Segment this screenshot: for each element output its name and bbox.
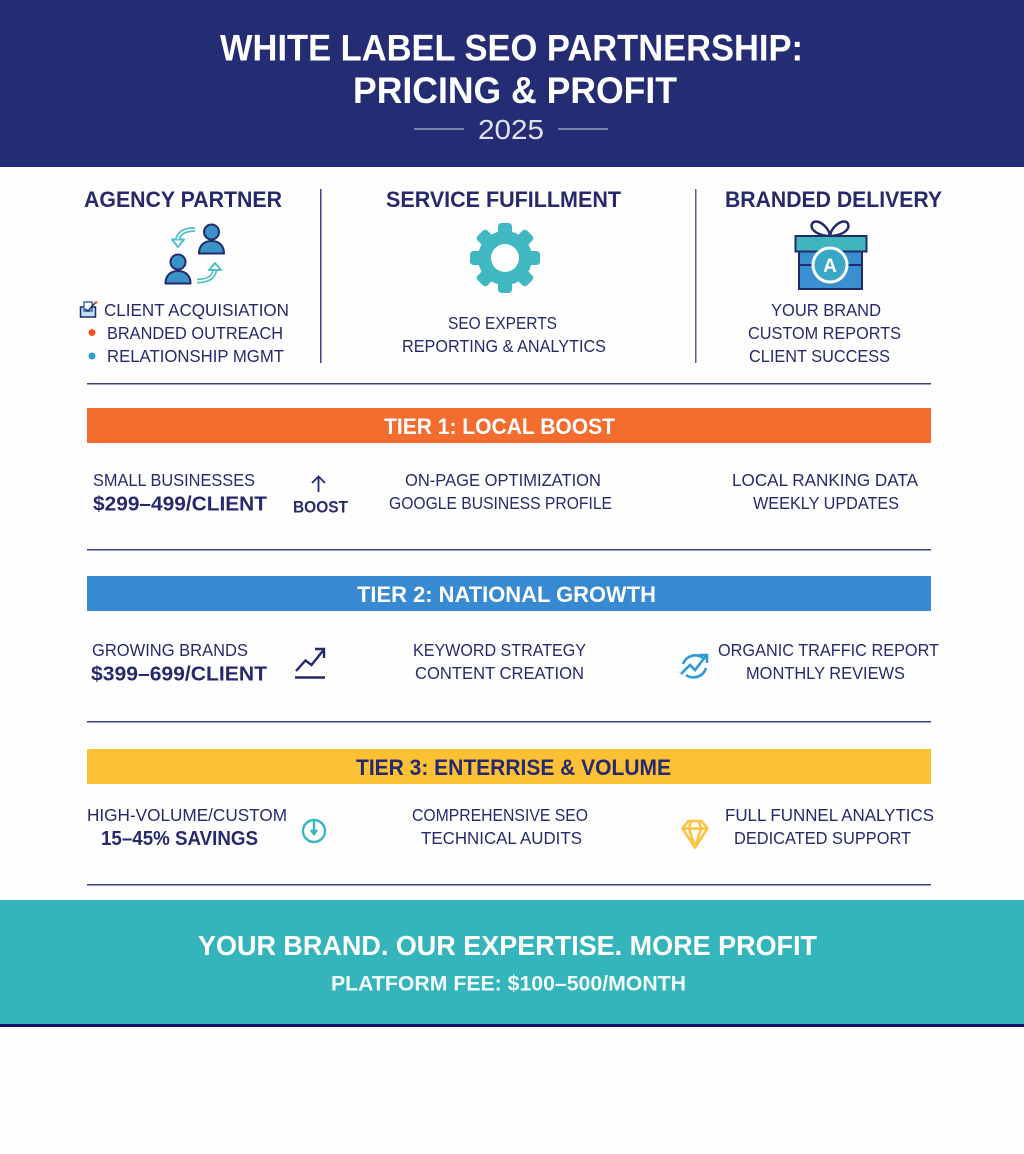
tier 3 reports: DEDICATED SUPPORT xyxy=(734,828,911,848)
icon: gift box xyxy=(796,222,866,289)
text: service details xyxy=(402,313,606,356)
tier 1 services xyxy=(389,470,612,513)
list: agency services: RELATIONSHIP MGMT xyxy=(107,346,284,366)
tier 3 services xyxy=(412,805,588,848)
text: service details: REPORTING & ANALYTICS xyxy=(402,336,606,356)
tier 1 reports xyxy=(732,470,918,513)
tier 1 banner xyxy=(87,408,931,443)
tier 1 services: ON-PAGE OPTIMIZATION xyxy=(405,470,601,490)
text: delivery details: CUSTOM REPORTS xyxy=(748,323,901,343)
icon: diamond xyxy=(682,821,708,848)
tier 2 banner: TIER 2: NATIONAL GROWTH xyxy=(357,582,656,607)
text: delivery details: CLIENT SUCCESS xyxy=(749,346,890,366)
heading: service fulfillment: SERVICE FUFILLMENT xyxy=(386,187,622,212)
text: delivery details: YOUR BRAND xyxy=(771,300,881,320)
tier 2 services: KEYWORD STRATEGY xyxy=(413,640,586,660)
tier 2 banner xyxy=(87,576,931,611)
tier 2 reports xyxy=(718,640,939,683)
icon: growth chart xyxy=(295,649,325,678)
tier 1 reports: LOCAL RANKING DATA xyxy=(732,470,918,490)
tier 3 banner xyxy=(87,749,931,784)
list: agency services: CLIENT ACQUISIATION xyxy=(104,300,289,320)
icon: boost arrow: BOOST xyxy=(293,498,348,516)
tier 2 pricing: GROWING BRANDS xyxy=(92,640,248,660)
panel: tier 1 xyxy=(87,408,931,516)
icon: timer xyxy=(303,819,325,842)
title xyxy=(220,28,803,111)
heading: agency partner: AGENCY PARTNER xyxy=(84,187,282,212)
icon: checklist xyxy=(80,301,97,317)
title: WHITE LABEL SEO PARTNERSHIP: xyxy=(220,28,803,68)
tier 1 pricing: SMALL BUSINESSES xyxy=(93,470,255,490)
footer platform fee: PLATFORM FEE: $100–500/MONTH xyxy=(331,972,686,996)
tier 2 reports: ORGANIC TRAFFIC REPORT xyxy=(718,640,939,660)
icon: gear xyxy=(470,223,540,293)
title: PRICING & PROFIT xyxy=(353,70,677,111)
tier 2 services: CONTENT CREATION xyxy=(415,663,584,683)
tier 2 pricing xyxy=(91,640,267,686)
tier 1 pricing xyxy=(93,470,267,516)
tier 2 reports: MONTHLY REVIEWS xyxy=(746,663,905,683)
panel: tier 3 xyxy=(87,749,934,850)
tier 3 reports: FULL FUNNEL ANALYTICS xyxy=(725,805,934,825)
panel: branded delivery xyxy=(725,187,942,366)
tier 3 banner: TIER 3: ENTERRISE & VOLUME xyxy=(356,755,671,780)
tier 1 reports: WEEKLY UPDATES xyxy=(753,493,899,513)
panel: footer banner xyxy=(0,900,1024,1027)
panel: tier 2 xyxy=(87,576,939,686)
tier 1 services: GOOGLE BUSINESS PROFILE xyxy=(389,493,612,513)
year label: 2025 xyxy=(478,114,544,145)
footer tagline: YOUR BRAND. OUR EXPERTISE. MORE PROFIT xyxy=(198,930,817,961)
list: agency services xyxy=(88,300,289,366)
icon: boost arrow xyxy=(293,476,348,516)
tier 3 services: TECHNICAL AUDITS xyxy=(421,828,582,848)
tier 2 pricing: $399–699/CLIENT xyxy=(91,664,267,686)
icon: people exchange xyxy=(166,224,224,284)
panel: service fulfillment xyxy=(386,187,622,356)
text: delivery details xyxy=(748,300,901,366)
heading: branded delivery: BRANDED DELIVERY xyxy=(725,187,942,212)
tier 3 pricing: HIGH-VOLUME/CUSTOM xyxy=(87,805,287,825)
tier 2 services xyxy=(413,640,586,683)
panel: agency partner xyxy=(80,187,289,366)
list: agency services: BRANDED OUTREACH xyxy=(107,323,283,343)
tier 3 pricing xyxy=(87,805,287,850)
text: service details: SEO EXPERTS xyxy=(448,313,557,333)
tier 3 services: COMPREHENSIVE SEO xyxy=(412,805,588,825)
icon: traffic trend xyxy=(681,655,707,677)
icon: gift box: A xyxy=(823,256,837,277)
tier 3 pricing: 15–45% SAVINGS xyxy=(101,828,258,850)
tier 1 banner: TIER 1: LOCAL BOOST xyxy=(384,414,616,439)
tier 3 reports xyxy=(725,805,934,848)
tier 1 pricing: $299–499/CLIENT xyxy=(93,494,267,516)
panel: header banner xyxy=(0,0,1024,167)
